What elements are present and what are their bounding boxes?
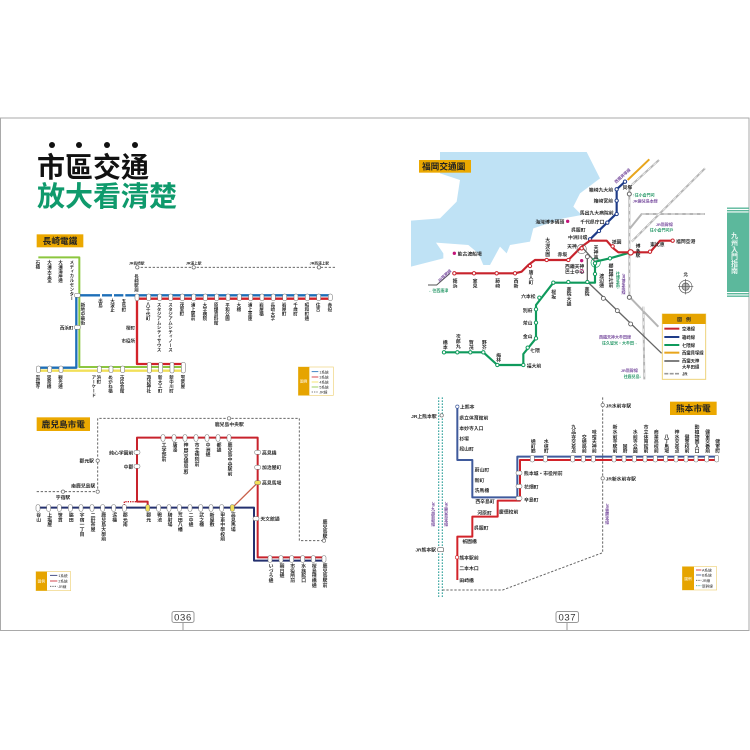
station labels: JR熊本駅 xyxy=(415,547,436,554)
station labels: 新地中華街 xyxy=(80,302,86,327)
station labels: 朝日通 xyxy=(278,563,284,579)
station labels xyxy=(411,402,720,584)
station labels: 橋本 xyxy=(442,339,447,351)
station labels: 宇宿駅 xyxy=(56,494,70,501)
legend: JR線 xyxy=(702,578,710,583)
station labels: 石橋 xyxy=(35,260,41,270)
page number 037 xyxy=(556,612,578,630)
station labels: 郡元 xyxy=(145,512,151,523)
line annotations: JR新幹線 xyxy=(621,367,638,373)
heading: Nagasaki: 長崎電鐵 xyxy=(43,235,78,246)
legend: JR線 xyxy=(58,584,67,589)
station labels: 長崎大学 xyxy=(270,303,276,321)
legend xyxy=(298,367,333,395)
station labels: 新屋敷 xyxy=(208,512,214,528)
station labels: 辛島町 xyxy=(524,497,539,504)
station labels: 唐人町 xyxy=(527,269,533,285)
legend: 圖例 xyxy=(38,578,45,583)
JR lines xyxy=(439,397,603,598)
station labels: 蛍茶屋 xyxy=(180,374,186,390)
line annotations xyxy=(428,167,674,379)
station labels: 八丁馬場 xyxy=(663,434,669,455)
station labels: 通町筋 xyxy=(530,438,535,455)
station labels: 薬院 xyxy=(583,286,589,298)
station labels: 工学部前 xyxy=(160,442,166,463)
heading: Fukuoka: 福岡交通圖 xyxy=(422,160,466,171)
station labels: 二軒茶屋 xyxy=(89,512,95,533)
station labels: 思案橋 xyxy=(46,375,52,390)
legend: 七隈線 xyxy=(682,342,696,349)
station labels: 鹿兒島中央駅 xyxy=(215,421,244,428)
station labels: 田崎橋 xyxy=(459,577,474,584)
station labels: 大橋 xyxy=(236,302,242,313)
station labels: 博多駅 xyxy=(634,243,640,259)
heading: Kumamoto xyxy=(670,402,717,415)
station labels: 祇園橋 xyxy=(462,538,477,545)
station labels: めがね橋 xyxy=(108,375,113,394)
station labels: 西浜町 xyxy=(60,324,74,331)
station labels xyxy=(442,184,695,370)
legend xyxy=(36,572,71,591)
stations xyxy=(438,403,719,559)
station labels: 千歳町 xyxy=(293,302,298,317)
legend: JR線 xyxy=(319,389,328,394)
Kuko line xyxy=(453,192,674,299)
station labels: 中郡 xyxy=(124,463,133,470)
heading: Kumamoto: 熊本市電 xyxy=(676,403,711,414)
heading: Fukuoka xyxy=(419,160,471,173)
station labels: 郡元南 xyxy=(122,512,127,527)
station labels: 祇園 xyxy=(612,239,622,246)
station labels: 神水交差点 xyxy=(673,428,679,455)
station labels: 次郎丸 xyxy=(455,333,460,350)
station labels: 鹿兒島中央駅前 xyxy=(226,442,232,478)
station labels: 福大前 xyxy=(527,363,541,370)
page number 036 xyxy=(172,612,194,630)
legend: 大牟田線 xyxy=(682,364,700,371)
station labels: 呉服町 xyxy=(474,525,489,532)
station labels: メディカルセンター xyxy=(69,260,75,300)
station labels: 健軍交番前 xyxy=(704,428,710,455)
station labels: 健軍校前 xyxy=(683,433,689,455)
station labels: 新大工町 xyxy=(157,374,163,393)
station labels: 五島町 xyxy=(121,298,127,312)
station labels: 二中通 xyxy=(187,512,193,528)
page border xyxy=(0,118,749,630)
panel: Kumamoto tram map xyxy=(411,397,720,598)
station labels: 水道町 xyxy=(543,438,548,454)
line annotations: 往博多南↓ xyxy=(616,270,621,290)
title xyxy=(37,142,177,212)
route lines xyxy=(38,257,335,371)
station labels: 新町 xyxy=(475,477,484,484)
station labels: 南鹿兒島駅 xyxy=(71,483,95,490)
station labels: 西新 xyxy=(512,278,518,289)
station labels: 純心学園前 xyxy=(109,449,133,456)
line annotations: ←往西唐津 xyxy=(428,287,448,293)
station labels: 浜町 xyxy=(96,374,102,384)
station labels: 桜島棧橋通 xyxy=(311,563,316,589)
station labels: 昭和町通 xyxy=(304,303,310,322)
station labels: 天神 xyxy=(567,243,577,250)
station labels: 原爆資料館 xyxy=(213,303,219,327)
station labels: 宇宿一丁目 xyxy=(78,512,84,538)
station labels: 味噌天神前 xyxy=(591,428,596,455)
page number 037: 037 xyxy=(558,612,576,624)
station labels: 大浦天主堂 xyxy=(47,259,52,283)
station labels: 八千代町 xyxy=(145,303,151,321)
Nanakuma line xyxy=(442,252,631,367)
legend: 5系統 xyxy=(319,384,329,389)
station labels: 岩屋町 xyxy=(281,302,287,317)
station labels: 水族館口 xyxy=(300,563,306,584)
line annotations: 西鐵貝塚線 xyxy=(613,167,632,184)
station labels: 上塩屋 xyxy=(46,512,52,528)
legend: 箱崎線 xyxy=(682,334,696,341)
stations xyxy=(36,417,326,562)
station labels: 千代県庁口 xyxy=(580,218,605,225)
line annotations: 往久留米・大牟田→ xyxy=(602,340,638,346)
station labels: 河原町 xyxy=(477,510,492,517)
station labels: 浦上車庫 xyxy=(247,302,253,322)
Hakozaki line xyxy=(588,180,627,241)
line annotations: 西鐵天神大牟田線 xyxy=(599,334,631,340)
station labels: 県立体育館前 xyxy=(459,415,488,422)
station labels: 呉服町 xyxy=(571,227,586,234)
station labels: JR新水前寺駅 xyxy=(606,476,636,483)
station labels: 慶徳校前 xyxy=(499,509,518,516)
stations xyxy=(36,266,332,373)
station labels: 中洲通 xyxy=(204,442,210,458)
legend: 圖例 xyxy=(300,379,308,384)
station labels: 天文館通 xyxy=(260,516,280,523)
panel: Fukuoka transit map xyxy=(411,152,706,379)
Nishitetsu Kaizuka line xyxy=(628,159,649,180)
station labels: 藤崎 xyxy=(494,278,500,289)
station labels: 上熊本 xyxy=(460,404,475,411)
legend xyxy=(682,567,717,590)
station labels: 市役所前 xyxy=(289,563,295,584)
station labels: 高見馬場 xyxy=(262,480,281,487)
station labels: JR鹿兒島本線 xyxy=(444,502,449,527)
station labels: 別府 xyxy=(523,307,533,314)
station labels: 熊本城・市役所前 xyxy=(524,470,563,477)
station labels: 赤迫 xyxy=(327,303,333,313)
station labels: 谷山 xyxy=(35,512,41,523)
line annotations: 往小倉門司戶 xyxy=(650,226,674,232)
line annotations: ↑往小倉門司 xyxy=(633,192,655,198)
station labels: 福岡空港 xyxy=(676,238,695,245)
title: 放大看清楚 xyxy=(37,181,177,212)
station labels: 商業高校前 xyxy=(653,428,658,455)
heading: Nagasaki xyxy=(37,234,83,247)
legend: 1系統 xyxy=(58,573,68,578)
station labels: 貝塚 xyxy=(622,184,632,191)
station labels: 鴨池 xyxy=(156,512,162,522)
station labels: 高見馬場 xyxy=(230,512,235,533)
station labels: 梅林 xyxy=(495,352,501,364)
station labels: 郡元駅 xyxy=(79,458,94,465)
station labels: 箱崎宮前 xyxy=(594,198,613,205)
station labels xyxy=(35,259,333,398)
landmarks: 海灣博多碼頭 xyxy=(535,218,564,225)
station labels: 金山 xyxy=(523,333,533,340)
legend: 西鐵貝塚線 xyxy=(682,350,704,357)
station labels: 長崎駅前 xyxy=(134,274,139,293)
station labels: 西辛島町 xyxy=(475,498,495,505)
station labels: 馬出九大病院前 xyxy=(580,209,614,216)
landmarks xyxy=(453,218,584,275)
station labels: 茂里町 xyxy=(179,302,185,317)
station labels: 姪浜 xyxy=(451,278,457,289)
station labels: JR上熊本駅 xyxy=(411,413,437,420)
station labels: 杉塚 xyxy=(459,435,469,442)
station labels: スタジアムシティノース xyxy=(168,303,173,353)
station labels: 健軍町 xyxy=(714,438,720,454)
icon: compass xyxy=(678,271,693,294)
side tab xyxy=(727,208,749,297)
landmarks: 能古渡船場 xyxy=(458,250,482,257)
station labels: 高見橋 xyxy=(262,449,277,456)
legend: 2系統 xyxy=(58,579,68,584)
legend: JR xyxy=(682,372,688,377)
station labels: JR水前寺駅 xyxy=(606,402,631,409)
legend: 3系統 xyxy=(319,374,329,379)
legend: B系統 xyxy=(702,573,712,578)
station labels: アーケード xyxy=(91,375,97,398)
line annotations: 往鹿兒島↓ xyxy=(624,373,642,379)
station labels: 武之橋 xyxy=(198,512,204,528)
station labels: 東比恵 xyxy=(650,241,665,248)
station labels: 洗馬橋 xyxy=(475,487,489,494)
station labels: 出島 xyxy=(98,297,103,309)
station labels: JR豐肥本線 xyxy=(605,503,610,524)
station labels: JR浦上駅 xyxy=(186,261,202,266)
station labels: 水前寺公園 xyxy=(632,428,637,455)
station labels: 鹿兒島駅前 xyxy=(321,563,327,589)
panel: Nagasaki tram map xyxy=(35,234,335,398)
station labels: 鹿兒島大學前 xyxy=(100,512,106,543)
station labels: 大濠公園 xyxy=(544,237,550,258)
station labels: 神田(交通局前) xyxy=(182,442,188,475)
station labels: 野芥 xyxy=(481,339,486,351)
page number 036: 036 xyxy=(174,612,192,624)
station labels: いづろ通 xyxy=(267,563,273,584)
station labels: 大学病院 xyxy=(202,302,208,322)
station labels: 加治屋町 xyxy=(262,464,281,471)
station labels: 九品寺交差点 xyxy=(570,424,576,455)
station labels: 赤坂 xyxy=(557,251,567,258)
station labels: 渡辺通 xyxy=(598,273,604,289)
station labels: 大波止 xyxy=(110,297,115,312)
station labels xyxy=(35,421,327,589)
station labels: 岩屋橋 xyxy=(259,302,264,318)
legend: 4系統 xyxy=(319,379,329,384)
heading: Kagoshima xyxy=(37,417,90,431)
station labels: 天神南 xyxy=(592,245,598,260)
route lines xyxy=(37,418,324,561)
station labels: 蔚山町 xyxy=(475,467,489,474)
station labels: 崇福寺 xyxy=(35,374,41,389)
line annotations: JR新幹線 xyxy=(656,221,673,227)
station labels: JR九州新幹線 xyxy=(431,502,436,527)
station labels: 二本木口 xyxy=(459,565,479,572)
station labels: 市役所 xyxy=(122,338,135,345)
legend: 西鐵天神 xyxy=(682,358,700,365)
station labels: 諏訪神社 xyxy=(146,374,152,394)
station labels: 脇田 xyxy=(68,512,73,523)
station labels: 都通 xyxy=(215,442,221,453)
station labels: 本妙寺入口 xyxy=(459,425,484,432)
side tab: 九州入門指南 xyxy=(730,231,738,275)
station labels: 櫛田神社前 xyxy=(607,263,613,289)
station labels: 桜坂 xyxy=(550,289,556,300)
panel: Kagoshima tram map xyxy=(35,417,327,591)
station labels: 茶山 xyxy=(523,320,533,327)
station labels: 騎射場 xyxy=(166,512,172,528)
station labels: 市立病院前 xyxy=(193,442,199,468)
legend: 空港線 xyxy=(682,326,696,332)
station labels: 唐湊 xyxy=(171,442,177,453)
station labels: 六本松 xyxy=(521,293,536,300)
station labels: 国府 xyxy=(621,444,627,455)
station labels: 涙橋 xyxy=(111,512,117,523)
legend: A系統 xyxy=(702,568,712,573)
station labels: 荒田八幡 xyxy=(177,512,182,533)
sea xyxy=(411,152,600,267)
station labels: 薬院大通 xyxy=(565,286,571,307)
station labels: JR西浦上駅 xyxy=(310,261,329,266)
heading: Kagoshima: 鹿兒島市電 xyxy=(42,419,85,430)
station labels: 熊本駅前 xyxy=(459,554,479,561)
station labels: JR長崎駅 xyxy=(129,261,145,266)
JR lines xyxy=(428,160,705,379)
station labels: 甲東中學校前 xyxy=(219,512,225,543)
station labels: 中洲川端 xyxy=(568,234,587,241)
line annotations: JR博多南線 xyxy=(621,273,626,294)
station labels: 段山町 xyxy=(459,446,474,453)
station labels: 箱崎九大前 xyxy=(589,186,613,193)
legend: 新幹線 xyxy=(702,583,713,588)
icon: compass: 北 xyxy=(683,271,688,278)
station labels: 市民会館 xyxy=(119,374,125,394)
station labels: スタジアムシティサウス xyxy=(156,303,162,353)
station labels: 笹貫 xyxy=(57,512,62,523)
station labels: 平和公園 xyxy=(225,303,230,322)
station labels: 花畑町 xyxy=(524,483,539,490)
station labels: 動植物園入口 xyxy=(693,424,699,455)
station labels: 七隈 xyxy=(530,347,540,354)
legend xyxy=(662,314,706,379)
station labels: 観光通 xyxy=(58,374,63,390)
line annotations: JR筑肥線 xyxy=(436,267,452,283)
station labels: 大浦海岸通 xyxy=(58,259,63,284)
line annotations: JR鹿兒島本線 xyxy=(633,198,658,204)
station labels: 住吉 xyxy=(315,302,321,313)
station labels: 鹿兒島駅 xyxy=(321,519,327,540)
station labels: 新中川町 xyxy=(169,374,174,393)
legend: 圖例 xyxy=(684,576,692,581)
landmarks: 巴士中心 xyxy=(565,268,584,275)
station labels: 新水前寺駅前 xyxy=(611,424,617,455)
Nishitetsu Tenjin Omuta line xyxy=(582,247,662,353)
legend: 1系統 xyxy=(319,369,329,374)
station labels: 桜町 xyxy=(126,324,135,331)
station labels: 交通局前 xyxy=(581,433,586,455)
station labels: 市立体育館前 xyxy=(642,424,648,455)
landmarks: 西鐵天神 xyxy=(565,263,584,270)
legend: 圖 例 xyxy=(677,316,691,323)
route lines xyxy=(457,407,717,580)
title: 市區交通 xyxy=(37,152,149,183)
station labels: 賀茂 xyxy=(468,339,473,351)
station labels: 浦上駅前 xyxy=(190,302,196,322)
station labels: 室見 xyxy=(471,278,477,289)
